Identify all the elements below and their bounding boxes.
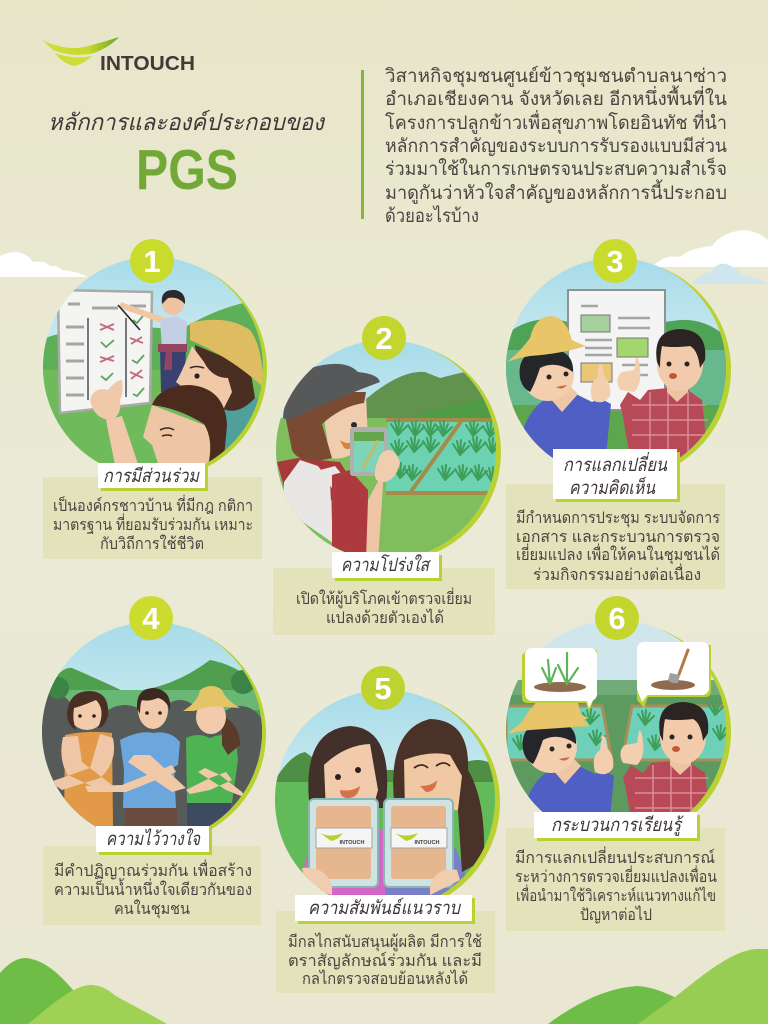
label 5 xyxy=(295,895,475,924)
label 1 xyxy=(98,463,208,491)
panel: 1 participation xyxy=(40,239,270,559)
label 3 xyxy=(553,449,680,502)
illustration: three people with crossed arms xyxy=(42,624,262,827)
number badge 5 xyxy=(361,666,405,710)
text panel 6 xyxy=(506,828,725,931)
illustration: women holding rice boxes xyxy=(275,692,495,895)
description 4 xyxy=(54,859,252,919)
panel: 4 trust xyxy=(30,596,275,925)
text panel 2 xyxy=(273,568,495,635)
number badge 6 xyxy=(595,596,639,640)
description 3 xyxy=(516,509,720,584)
crescent xyxy=(280,692,500,912)
intro paragraph: หลักการสำคัญของระบบการรับรองแบบมีส่วน xyxy=(385,135,727,157)
description 3: ร่วมกิจกรรมอย่างต่อเนื่อง xyxy=(533,563,701,584)
description 6: เพื่อนำมาใช้วิเคราะห์แนวทางแก้ไข xyxy=(516,884,716,905)
number badge 2 xyxy=(362,316,406,360)
intro paragraph: ร่วมมาใช้ในการเกษตรจนประสบความสำเร็จ xyxy=(385,156,727,179)
logo swoosh xyxy=(42,37,119,66)
speech bubble: hoe xyxy=(637,642,711,708)
intro paragraph: ด้วยอะไรบ้าง xyxy=(385,205,479,226)
description 5: กลไกตรวจสอบย้อนหลังได้ xyxy=(302,969,468,988)
logo wordmark: INTOUCH xyxy=(100,52,195,75)
description 1: มาตรฐาน ที่ยอมรับร่วมกัน เหมาะ xyxy=(53,513,253,534)
illustration: women holding rice boxes: INTOUCH xyxy=(415,840,439,846)
label 4: ความไว้วางใจ xyxy=(106,828,201,849)
number badge 1 xyxy=(130,239,174,283)
description 4: มีคำปฏิญาณร่วมกัน เพื่อสร้าง xyxy=(54,859,252,880)
cloud: right white xyxy=(652,230,768,267)
label 2: ความโปร่งใส xyxy=(341,554,431,575)
panel: 2 transparency xyxy=(270,316,505,635)
description 5: ตราสัญลักษณ์ร่วมกัน และมี xyxy=(288,951,482,970)
number badge 6: 6 xyxy=(608,601,626,636)
intro paragraph: วิสาหกิจชุมชนศูนย์ข้าวชุมชนตำบลนาซ่าว xyxy=(384,65,727,88)
bottom hills: right xyxy=(548,949,768,1024)
text panel 5 xyxy=(276,911,495,993)
cloud: right blue xyxy=(692,264,768,284)
label 2 xyxy=(332,552,442,581)
intro paragraph xyxy=(384,65,727,226)
crescent xyxy=(46,624,266,844)
intro paragraph: มาดูกันว่าหัวใจสำคัญของหลักการนี้ประกอบ xyxy=(385,179,727,204)
description 4: คนในชุมชน xyxy=(114,899,190,919)
description 2: แปลงด้วยตัวเองได้ xyxy=(326,608,444,627)
description 6: มีการแลกเปลี่ยนประสบการณ์ xyxy=(515,846,715,867)
label 4 xyxy=(96,826,212,855)
heading: PGS: PGS xyxy=(136,138,238,202)
crescent xyxy=(281,342,501,562)
description 3: เอกสาร และกระบวนการตรวจ xyxy=(516,529,720,546)
cloud: left xyxy=(0,252,88,277)
label 3: การแลกเปลี่ยน xyxy=(563,451,668,475)
speech bubble: seedlings xyxy=(522,648,597,712)
description 1: กับวิถีการใช้ชีวิต xyxy=(100,534,204,553)
number badge 1: 1 xyxy=(143,244,161,279)
description 4: ความเป็นน้ำหนึ่งใจเดียวกันของ xyxy=(54,878,252,899)
panel: 3 exchange of ideas xyxy=(500,239,735,589)
description 3: มีกำหนดการประชุม ระบบจัดการ xyxy=(516,509,720,528)
intro paragraph: อำเภอเชียงคาน จังหวัดเลย อีกหนึ่งพื้นที่ใน xyxy=(385,85,727,109)
intro paragraph: โครงการปลูกข้าวเพื่อสุขภาพโดยอินทัช ที่นำ xyxy=(385,110,727,135)
text panel 4 xyxy=(43,846,261,925)
description 5 xyxy=(288,932,482,988)
illustration: two farmers at a poster xyxy=(506,260,726,458)
label 6 xyxy=(534,812,700,841)
bottom hills: left xyxy=(0,958,167,1024)
description 3: เยี่ยมแปลง เพื่อให้คนในชุมชนได้ xyxy=(516,543,720,565)
number badge 4 xyxy=(129,596,173,640)
number badge 5: 5 xyxy=(374,671,392,706)
crescent xyxy=(47,259,267,479)
intro divider and text xyxy=(361,65,727,226)
label 1: การมีส่วนร่วม xyxy=(103,465,200,486)
crescent xyxy=(511,260,731,480)
description 6: ปัญหาต่อไป xyxy=(580,905,652,924)
logo: Intouch xyxy=(42,37,195,75)
label 5: ความสัมพันธ์แนวราบ xyxy=(308,897,461,918)
number badge 4: 4 xyxy=(142,601,160,636)
illustration: two farmers in paddy field xyxy=(506,622,726,812)
description 1: เป็นองค์กรชาวบ้าน ที่มีกฎ กติกา xyxy=(53,494,253,515)
number badge 3: 3 xyxy=(606,244,624,279)
illustration: consumer photographing paddy xyxy=(276,342,496,552)
number badge 2: 2 xyxy=(375,321,393,356)
title: หลักการและองค์ประกอบของ xyxy=(48,109,326,135)
description 6 xyxy=(515,846,717,924)
number badge 3 xyxy=(593,239,637,283)
illustration: women holding rice boxes: INTOUCH xyxy=(340,840,364,846)
description 6: ระหว่างการตรวจเยี่ยมแปลงเพื่อน xyxy=(515,865,717,886)
panel: 5 horizontal relationship xyxy=(270,666,505,993)
label 6: กระบวนการเรียนรู้ xyxy=(551,814,685,836)
illustration: board and farmers xyxy=(43,259,263,464)
label 3: ความคิดเห็น xyxy=(569,476,656,498)
crescent xyxy=(511,622,731,842)
panel: 6 learning process xyxy=(500,596,735,931)
description 5: มีกลไกสนับสนุนผู้ผลิต มีการใช้ xyxy=(288,932,482,952)
description 2 xyxy=(296,587,472,627)
description 1 xyxy=(53,494,253,553)
text panel 3 xyxy=(506,484,725,589)
text panel 1 xyxy=(43,477,262,559)
description 2: เปิดให้ผู้บริโภคเข้าตรวจเยี่ยม xyxy=(296,587,472,609)
